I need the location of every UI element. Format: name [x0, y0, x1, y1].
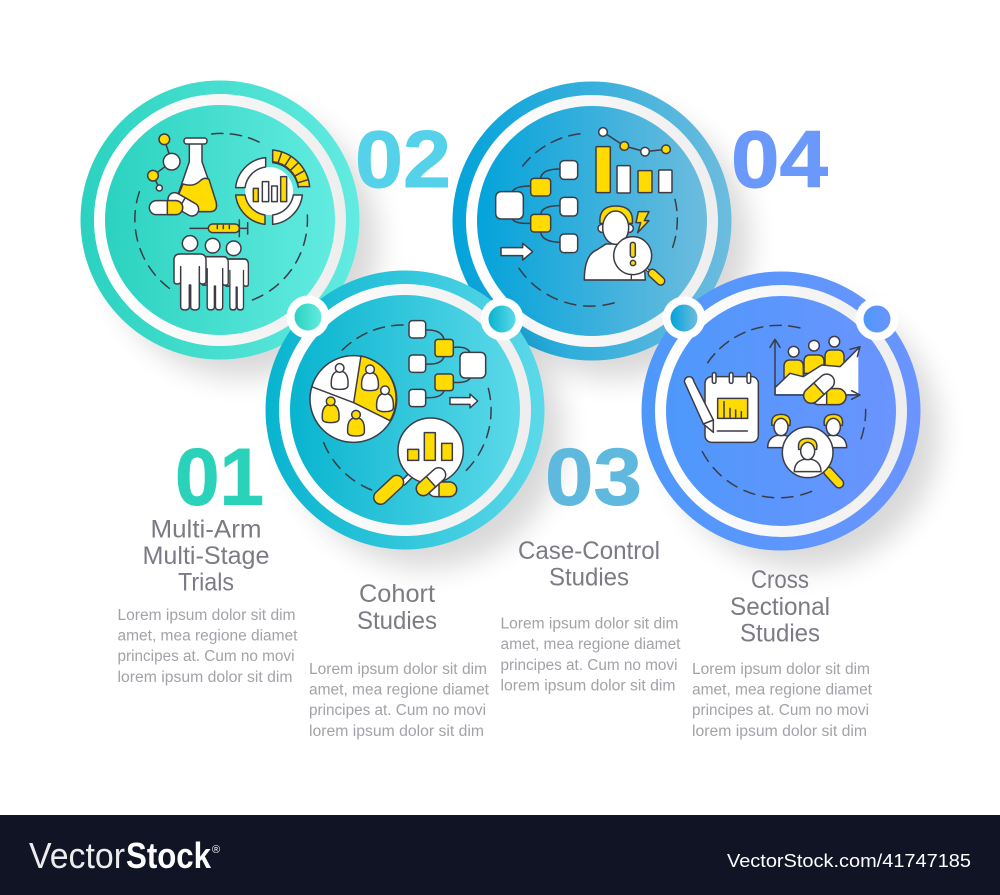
heading: Cohort Studies: Studies	[357, 607, 437, 635]
text block: 01 description: principes at. Cum no movi	[118, 648, 294, 665]
connector node: 03 to 04	[662, 296, 706, 340]
text block: 03 description: amet, mea regione diamet	[500, 636, 681, 653]
connector node: 02 to 03	[480, 298, 524, 340]
number 02: 02	[355, 115, 451, 205]
heading: Case-Control Studies	[518, 537, 660, 592]
number 03: 03	[545, 432, 642, 522]
footer logo: ®	[212, 844, 220, 856]
text block: 02 description: principes at. Cum no movi	[309, 702, 486, 719]
heading: Multi-Arm Multi-Stage Trials: Trials	[178, 568, 234, 596]
icon: flask, pills, chart, syringe and people	[135, 133, 310, 310]
heading: Cross Sectional Studies: Studies	[740, 620, 820, 648]
panel: circle 04 cross sectional studies	[642, 272, 939, 569]
heading: Multi-Arm Multi-Stage Trials: Multi-Stage	[142, 542, 270, 570]
heading: Cross Sectional Studies: Sectional	[730, 593, 830, 621]
heading: Cross Sectional Studies: Cross	[751, 566, 809, 594]
panel: circle 01 multi-arm multi-stage trials	[80, 80, 378, 378]
text block: 03 description: Lorem ipsum dolor sit dim	[500, 616, 678, 632]
text block: 04 description: amet, mea regione diamet	[692, 682, 873, 698]
connector node: 04 end	[856, 298, 898, 340]
heading: Cohort Studies	[357, 580, 437, 635]
heading: Case-Control Studies: Case-Control	[518, 537, 660, 565]
text block: 04 description: lorem ipsum dolor sit dim	[692, 723, 867, 740]
text block: 01 description: amet, mea regione diamet	[118, 628, 298, 644]
panel: circle 02 cohort studies	[266, 270, 563, 568]
icon: decision tree, bar chart and analyst	[496, 128, 677, 306]
text block: 02 description: Lorem ipsum dolor sit dim	[309, 661, 487, 678]
icon: notepad, growth chart, pills and people search	[684, 325, 866, 498]
text block: 04 description: Lorem ipsum dolor sit dim	[692, 661, 870, 678]
text block: 03 description: principes at. Cum no movi	[500, 657, 678, 674]
heading: Cross Sectional Studies	[730, 566, 830, 648]
number 04: 04	[731, 115, 828, 205]
footer bar	[0, 815, 1000, 895]
text block: 02 description	[309, 661, 490, 740]
text block: 04 description: principes at. Cum no movi	[692, 702, 869, 719]
text block: 02 description: amet, mea regione diamet	[309, 682, 490, 698]
heading: Multi-Arm Multi-Stage Trials	[142, 516, 270, 596]
heading: Case-Control Studies: Studies	[549, 564, 629, 592]
footer logo	[29, 835, 220, 876]
text block: 03 description	[500, 616, 681, 694]
footer logo: Vector	[29, 835, 125, 876]
heading: Multi-Arm Multi-Stage Trials: Multi-Arm	[150, 516, 262, 544]
text block: 01 description: lorem ipsum dolor sit dim	[118, 669, 292, 686]
text block: 03 description: lorem ipsum dolor sit dim	[500, 678, 676, 694]
panel: circle 03 case-control studies	[452, 82, 750, 379]
text block: 01 description: Lorem ipsum dolor sit dim	[118, 607, 296, 624]
text block: 01 description	[118, 607, 298, 686]
number 01: 01	[175, 432, 264, 522]
icon: population pie, flow tree and magnifier	[310, 321, 491, 498]
text block: 02 description: lorem ipsum dolor sit dim	[309, 723, 484, 740]
heading: Cohort Studies: Cohort	[359, 580, 435, 608]
footer logo: Stock	[126, 835, 212, 876]
connector node: 01 to 02	[286, 296, 330, 338]
text block: 04 description	[692, 661, 873, 740]
footer image id: VectorStock.com/41747185	[727, 850, 971, 871]
